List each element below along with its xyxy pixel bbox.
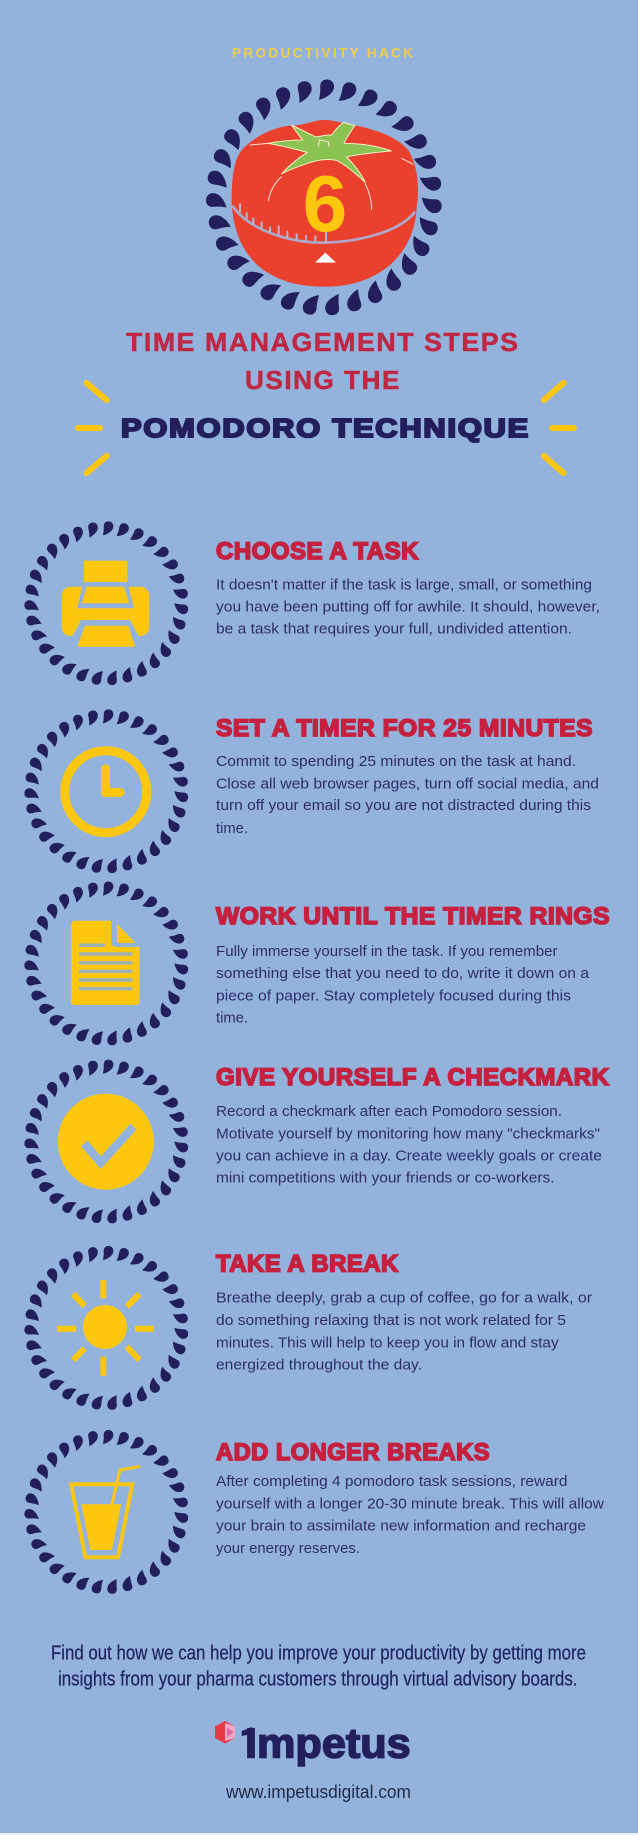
title [121, 329, 530, 443]
icon: printer [62, 561, 149, 647]
tomato illustration [232, 120, 418, 287]
decorative rays around title [78, 383, 574, 473]
body text [216, 1474, 604, 1557]
body text: mini competitions with your friends or co-workers. [216, 1171, 554, 1187]
ring [24, 1059, 189, 1224]
body text: minutes. This will help to keep you in flow and stay [216, 1335, 559, 1351]
body text: Commit to spending 25 minutes on the task at hand. [216, 754, 576, 770]
body text: be a task that requires your full, undivided attention. [216, 621, 572, 637]
heading: CHOOSE A TASK [216, 538, 419, 565]
hero number: 6 [303, 159, 347, 248]
icon: checkmark badge [58, 1094, 154, 1190]
body text: Close all web browser pages, turn off social media, and [216, 776, 599, 792]
heading: WORK UNTIL THE TIMER RINGS [216, 903, 610, 930]
body text: After completing 4 pomodoro task sessions, reward [216, 1474, 568, 1490]
body text: time. [216, 1011, 248, 1027]
body text [216, 577, 600, 637]
body text: yourself with a longer 20-30 minute break. This will allow [216, 1496, 604, 1512]
eyebrow heading: PRODUCTIVITY HACK [232, 46, 413, 60]
body text: It doesn't matter if the task is large, small, or something [216, 577, 592, 593]
body text: something else that you need to do, write it down on a [216, 966, 590, 982]
icon: sun [57, 1280, 154, 1376]
wordmark flag [242, 1727, 252, 1736]
heading: TAKE A BREAK [216, 1251, 399, 1278]
website url: www.impetusdigital.com [225, 1782, 411, 1802]
body text: turn off your email so you are not distracted during this [216, 798, 591, 814]
body text: do something relaxing that is not work related for 5 [216, 1313, 566, 1329]
wordmark: Impetus [245, 1720, 411, 1767]
ring [24, 1246, 189, 1410]
body text: Fully immerse yourself in the task. If you remember [216, 944, 558, 960]
body text [216, 754, 599, 837]
body text [216, 1104, 602, 1187]
body text [216, 1290, 592, 1373]
ring [24, 881, 189, 1046]
call to action text [51, 1642, 586, 1690]
logo: Impetus [215, 1720, 411, 1767]
panel: step 5 take a break [24, 1246, 592, 1410]
body text: piece of paper. Stay completely focused during this [216, 989, 571, 1005]
body text: you have been putting off for awhile. It should, however, [216, 599, 600, 615]
heading: SET A TIMER FOR 25 MINUTES [216, 715, 593, 742]
body text: energized throughout the day. [216, 1357, 422, 1373]
body text: Record a checkmark after each Pomodoro session. [216, 1104, 562, 1120]
icon: drink glass [71, 1467, 139, 1557]
heading: GIVE YOURSELF A CHECKMARK [216, 1064, 610, 1091]
ring [24, 1430, 189, 1594]
icon: document [71, 921, 140, 1005]
icon: gem mark [215, 1721, 235, 1744]
icon: clock [65, 751, 147, 833]
ring [24, 709, 189, 873]
title: USING THE [245, 367, 401, 395]
hero: tomato timer [206, 79, 442, 316]
heading: ADD LONGER BREAKS [216, 1439, 490, 1466]
body text [216, 944, 590, 1027]
panel: step 6 add longer breaks [24, 1430, 604, 1594]
title: POMODORO TECHNIQUE [121, 415, 530, 443]
body text: your brain to assimilate new information and recharge [216, 1518, 586, 1534]
body text: Breathe deeply, grab a cup of coffee, go for a walk, or [216, 1290, 592, 1306]
body text: you can achieve in a day. Create weekly goals or create [216, 1149, 602, 1165]
body text: time. [216, 821, 248, 837]
ring [24, 521, 189, 685]
panel: step 3 work until the timer rings [24, 881, 610, 1046]
body text: Motivate yourself by monitoring how many "checkmarks" [216, 1126, 600, 1142]
panel: step 4 give yourself a checkmark [24, 1059, 610, 1224]
body text: your energy reserves. [216, 1541, 360, 1557]
panel: step 2 set a timer [24, 709, 599, 873]
title: TIME MANAGEMENT STEPS [126, 329, 520, 357]
hero teardrop ring [206, 79, 442, 316]
panel: step 1 choose a task [24, 521, 600, 685]
